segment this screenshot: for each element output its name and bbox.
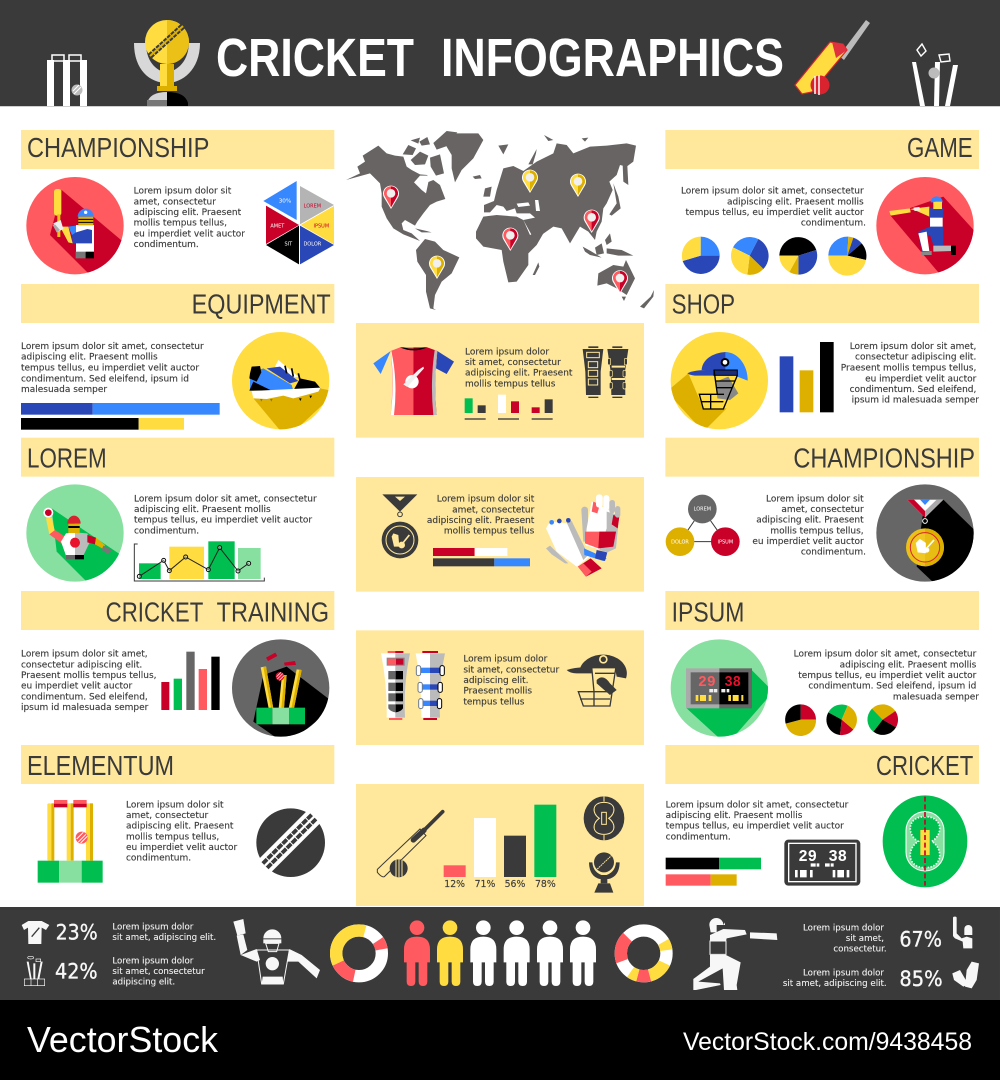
chart: hexagon: IPSUM [314, 223, 329, 229]
icon: trophy [134, 20, 200, 106]
heading: game [665, 130, 979, 169]
center panels one and two [356, 323, 644, 592]
heading: championship: CHAMPIONSHIP [27, 132, 209, 163]
icon: shirt [22, 921, 49, 944]
text block: adipiscing elit. Praesent [427, 516, 535, 526]
bar chart [666, 858, 761, 886]
text block: tempus tellus, eu imperdiet velit auctor [21, 363, 199, 373]
text block: mollis tempus tellus, [134, 219, 227, 229]
text block: tempus tellus, eu imperdiet velit auctor [798, 671, 977, 681]
heading: equipment: EQUIPMENT [192, 289, 331, 320]
heading: equipment [21, 284, 334, 323]
eurasia [484, 143, 636, 243]
australia [597, 260, 635, 295]
stat: 42 percent: 42% [55, 959, 98, 984]
text block: condimentum. [134, 526, 199, 536]
madagascar [533, 262, 539, 275]
bar chart [21, 403, 220, 430]
text block: condimentum. [126, 854, 191, 864]
heading: championship: CHAMPIONSHIP [793, 442, 975, 473]
bar chart [465, 395, 553, 420]
text block: sit amet, [846, 934, 884, 944]
text block: consectetur. [833, 945, 887, 955]
text block: condimentum. [801, 548, 866, 558]
title [216, 28, 784, 88]
text block: Praesent mollis [463, 687, 532, 697]
chart: hexagon: SIT [284, 242, 293, 248]
icon: batter outline [693, 918, 777, 990]
heading: lorem: LOREM [27, 442, 107, 473]
icon: bat outline and ball [377, 812, 443, 877]
text block: condimentum. [801, 219, 866, 229]
text block: sit amet, adipiscing elit. [783, 979, 887, 989]
text block: ipsum id malesuada semper [852, 396, 979, 406]
text block: amet, consectetur [452, 505, 535, 515]
text block: adipiscing elit. [112, 978, 175, 988]
new zealand [622, 290, 654, 308]
map pins [383, 170, 628, 294]
chart: hexagon: LOREM [304, 204, 321, 210]
icon: medal [382, 494, 418, 558]
heading: shop [665, 284, 979, 323]
heading: elementum [21, 745, 334, 784]
icon: shirt [373, 347, 454, 415]
text block: adipiscing elit. Praesent [756, 516, 864, 526]
icon: broken wicket circle [232, 639, 330, 737]
text block: consectetur adipiscing elit. [855, 353, 976, 363]
text block: mollis tempus tellus [444, 527, 535, 537]
icon: gloves [952, 962, 979, 988]
left column, lorem and training [21, 438, 337, 745]
icon: bowler outline [233, 919, 320, 984]
text block: condimentum. Sed eleifend, ipsum id [808, 682, 976, 692]
caribbean [415, 228, 432, 232]
icon: shoe circle [232, 332, 330, 430]
watermark band [0, 1000, 1000, 1080]
text block: sit amet, consectetur [112, 967, 205, 977]
heading: cricket training [21, 591, 334, 630]
icon: small batter [953, 917, 972, 948]
pie charts [682, 237, 866, 276]
arctic islands [403, 131, 457, 176]
text block: Lorem ipsum dolor [803, 968, 884, 978]
watermark: url text: VectorStock.com/9438458 [683, 1028, 972, 1056]
text block: adipiscing elit. Praesent [465, 369, 573, 379]
icon: scoreboard: 38 [828, 848, 847, 867]
icon: batter swing circle [876, 177, 974, 274]
text block: tempus tellus, eu imperdiet velit auctor [666, 822, 844, 832]
heading: cricket training: CRICKET [106, 597, 204, 628]
text block: Praesent mollis tempus tellus, [21, 671, 157, 681]
chart: hexagon: DOLOR [303, 242, 322, 248]
icon: bat and ball [795, 20, 870, 95]
icon: helmet [567, 655, 627, 706]
arctic russia [498, 135, 588, 164]
text block: ipsum id malesuada semper [21, 703, 149, 713]
icon: wicket [24, 956, 45, 986]
text block: adipiscing elit. [463, 676, 529, 686]
watermark: logo text: VectorStock [27, 1019, 219, 1060]
text block: Lorem ipsum dolor sit amet, consectetur [21, 342, 204, 352]
text block: adipiscing elit. Praesent mollis [727, 197, 864, 207]
chart: donut [336, 930, 382, 976]
heading: cricket [665, 745, 979, 784]
text block: sit amet, consectetur [463, 665, 559, 675]
network diagram: LOREM [694, 507, 711, 513]
text block: amet, consectetur [134, 197, 216, 207]
network diagram: DOLOR [671, 539, 689, 545]
chart: hexagon: AMET [270, 223, 285, 229]
heading: ipsum [665, 591, 979, 630]
combo chart [134, 541, 264, 581]
left column, elementum [21, 745, 334, 883]
bar chart [444, 805, 556, 890]
heading: lorem [21, 438, 334, 477]
text block: mollis tempus tellus [465, 379, 556, 389]
text block: condimentum. [134, 240, 199, 250]
center panels three and four [356, 630, 644, 906]
text block: sit amet, adipiscing elit. [112, 933, 216, 943]
icon: shin guards [583, 346, 628, 398]
text block: condimentum. Sed eleifend, [21, 692, 148, 702]
text block: mollis tempus tellus, [770, 526, 864, 536]
text block: Lorem ipsum dolor sit amet, consectetur [681, 187, 864, 197]
japan [609, 164, 628, 216]
chart: donut [621, 930, 666, 976]
text block: tempus tellus, eu imperdiet velit auctor [134, 516, 312, 526]
black and caspian seas [517, 200, 540, 211]
heading: shop: SHOP [672, 289, 735, 320]
text block: sit amet, consectetur [465, 358, 561, 368]
right column, game and shop [665, 130, 993, 432]
bar chart: 71% [475, 879, 496, 890]
bar chart [433, 548, 530, 566]
heading: ipsum: IPSUM [672, 597, 744, 628]
text block: amet, consectetur [781, 505, 864, 515]
icon: colored shin guards [381, 651, 445, 720]
panel: guards and helmet [356, 630, 644, 745]
text block: malesuada semper [893, 692, 979, 702]
icon: wicket [38, 800, 103, 883]
chart: hexagon: 30% [279, 198, 292, 204]
icon: field [584, 796, 624, 840]
africa [476, 215, 547, 282]
text block: consectetur adipiscing elit. [21, 660, 142, 670]
text block: Lorem ipsum dolor sit [766, 494, 864, 504]
stat: 23 percent: 23% [56, 920, 98, 945]
icon: batter circle [26, 177, 124, 274]
text block: Lorem ipsum dolor [465, 347, 549, 357]
heading: championship [21, 130, 334, 169]
text block: eu imperdiet velit auctor [134, 229, 245, 239]
bar chart [161, 652, 220, 710]
text block: Praesent mollis tempus tellus, [841, 363, 976, 373]
icon: ball [256, 808, 325, 877]
text block: adipiscing elit. Praesent mollis [840, 660, 977, 670]
icon: gloves [546, 494, 620, 577]
text block: tempus tellus [463, 697, 525, 707]
icon: scoreboard circle: 29 [698, 675, 716, 691]
heading: game: GAME [907, 132, 973, 163]
icon: scoreboard: 29 [798, 848, 817, 867]
bar chart: 12% [444, 879, 465, 890]
text block: Lorem ipsum dolor sit amet, consectetur [794, 650, 977, 660]
heading: championship [665, 438, 979, 477]
chart: hexagon [263, 181, 334, 264]
text block: condimentum. Sed eleifend, [850, 385, 976, 395]
text block: eu imperdiet velit auctor [752, 537, 864, 547]
bar chart: 56% [505, 879, 526, 890]
text block: adipiscing elit. Praesent mollis [21, 353, 158, 363]
text block: adipiscing elit. Praesent [126, 822, 234, 832]
text block: Lorem ipsum dolor sit amet, [850, 342, 976, 352]
text block: Lorem ipsum dolor sit [134, 187, 232, 197]
title: INFOGRAPHICS [441, 28, 784, 88]
text block: eu imperdiet velit auctor [21, 682, 133, 692]
icon: scoreboard circle: 38 [724, 675, 741, 691]
panel: medal and gloves [356, 477, 644, 592]
greenland [446, 133, 483, 182]
world map [346, 131, 654, 310]
text block: mollis tempus tellus, [126, 832, 219, 842]
north america [346, 146, 445, 241]
text block: tempus tellus, eu imperdiet velit auctor [686, 208, 864, 218]
text block: Lorem ipsum dolor [112, 922, 194, 932]
icon: scoreboard circle [670, 639, 768, 737]
text block: Lorem ipsum dolor [803, 923, 884, 933]
panel: bar chart and icons [356, 784, 644, 906]
south america [416, 239, 459, 310]
text block: Lorem ipsum dolor sit amet, consectetur [134, 494, 317, 504]
heading: elementum: ELEMENTUM [27, 750, 174, 781]
right column, cricket [665, 745, 979, 887]
text block: Lorem ipsum dolor sit amet, consectetur [666, 800, 849, 810]
people row [404, 920, 596, 986]
text block: Lorem ipsum dolor sit [437, 495, 535, 505]
header band [0, 0, 1000, 107]
icon: left wicket [47, 55, 87, 106]
text block: malesuada semper [21, 385, 107, 395]
bar chart [780, 342, 834, 412]
text block: Lorem ipsum dolor [463, 655, 548, 665]
southeast asia islands [583, 233, 633, 258]
icon: scoreboard [784, 840, 860, 886]
right column, championship and ipsum [665, 438, 993, 745]
text block: adipiscing elit. Praesent [134, 208, 242, 218]
icon: broken wicket [912, 44, 958, 106]
iceland [473, 175, 482, 179]
network diagram [666, 495, 740, 556]
text block: Lorem ipsum dolor sit [126, 800, 224, 810]
panel: shirt and guards [356, 323, 644, 438]
left column, championship and equipment [21, 130, 337, 438]
icon: helmet circle [667, 332, 768, 432]
text block: eu imperdiet velit auctor [865, 374, 977, 384]
text block: adipiscing elit. Praesent mollis [666, 811, 803, 821]
icon: medal circle [876, 484, 974, 582]
icon: dark trophy [589, 852, 620, 893]
footer band [0, 907, 1000, 1000]
stat: 85 percent: 85% [899, 967, 943, 992]
text block: adipiscing elit. Praesent mollis [134, 505, 271, 515]
pie charts [785, 704, 898, 736]
heading: cricket training: TRAINING [217, 597, 329, 628]
bar chart: 78% [535, 879, 556, 890]
hudson bay [414, 176, 428, 193]
stat: 67 percent: 67% [899, 928, 942, 953]
text block: Lorem ipsum dolor [112, 956, 194, 966]
text block: condimentum. Sed eleifend, ipsum id [21, 374, 189, 384]
title: CRICKET [216, 28, 414, 88]
text block: Lorem ipsum dolor sit amet, [21, 650, 148, 660]
text block: condimentum. [666, 832, 731, 842]
network diagram: IPSUM [718, 539, 733, 545]
text block: amet, consectetur [126, 811, 209, 821]
icon: bowler circle [26, 484, 124, 582]
heading: cricket: CRICKET [876, 750, 974, 781]
icon: cricket field [883, 795, 967, 887]
uk [483, 187, 492, 197]
text block: eu imperdiet velit auctor [126, 843, 238, 853]
